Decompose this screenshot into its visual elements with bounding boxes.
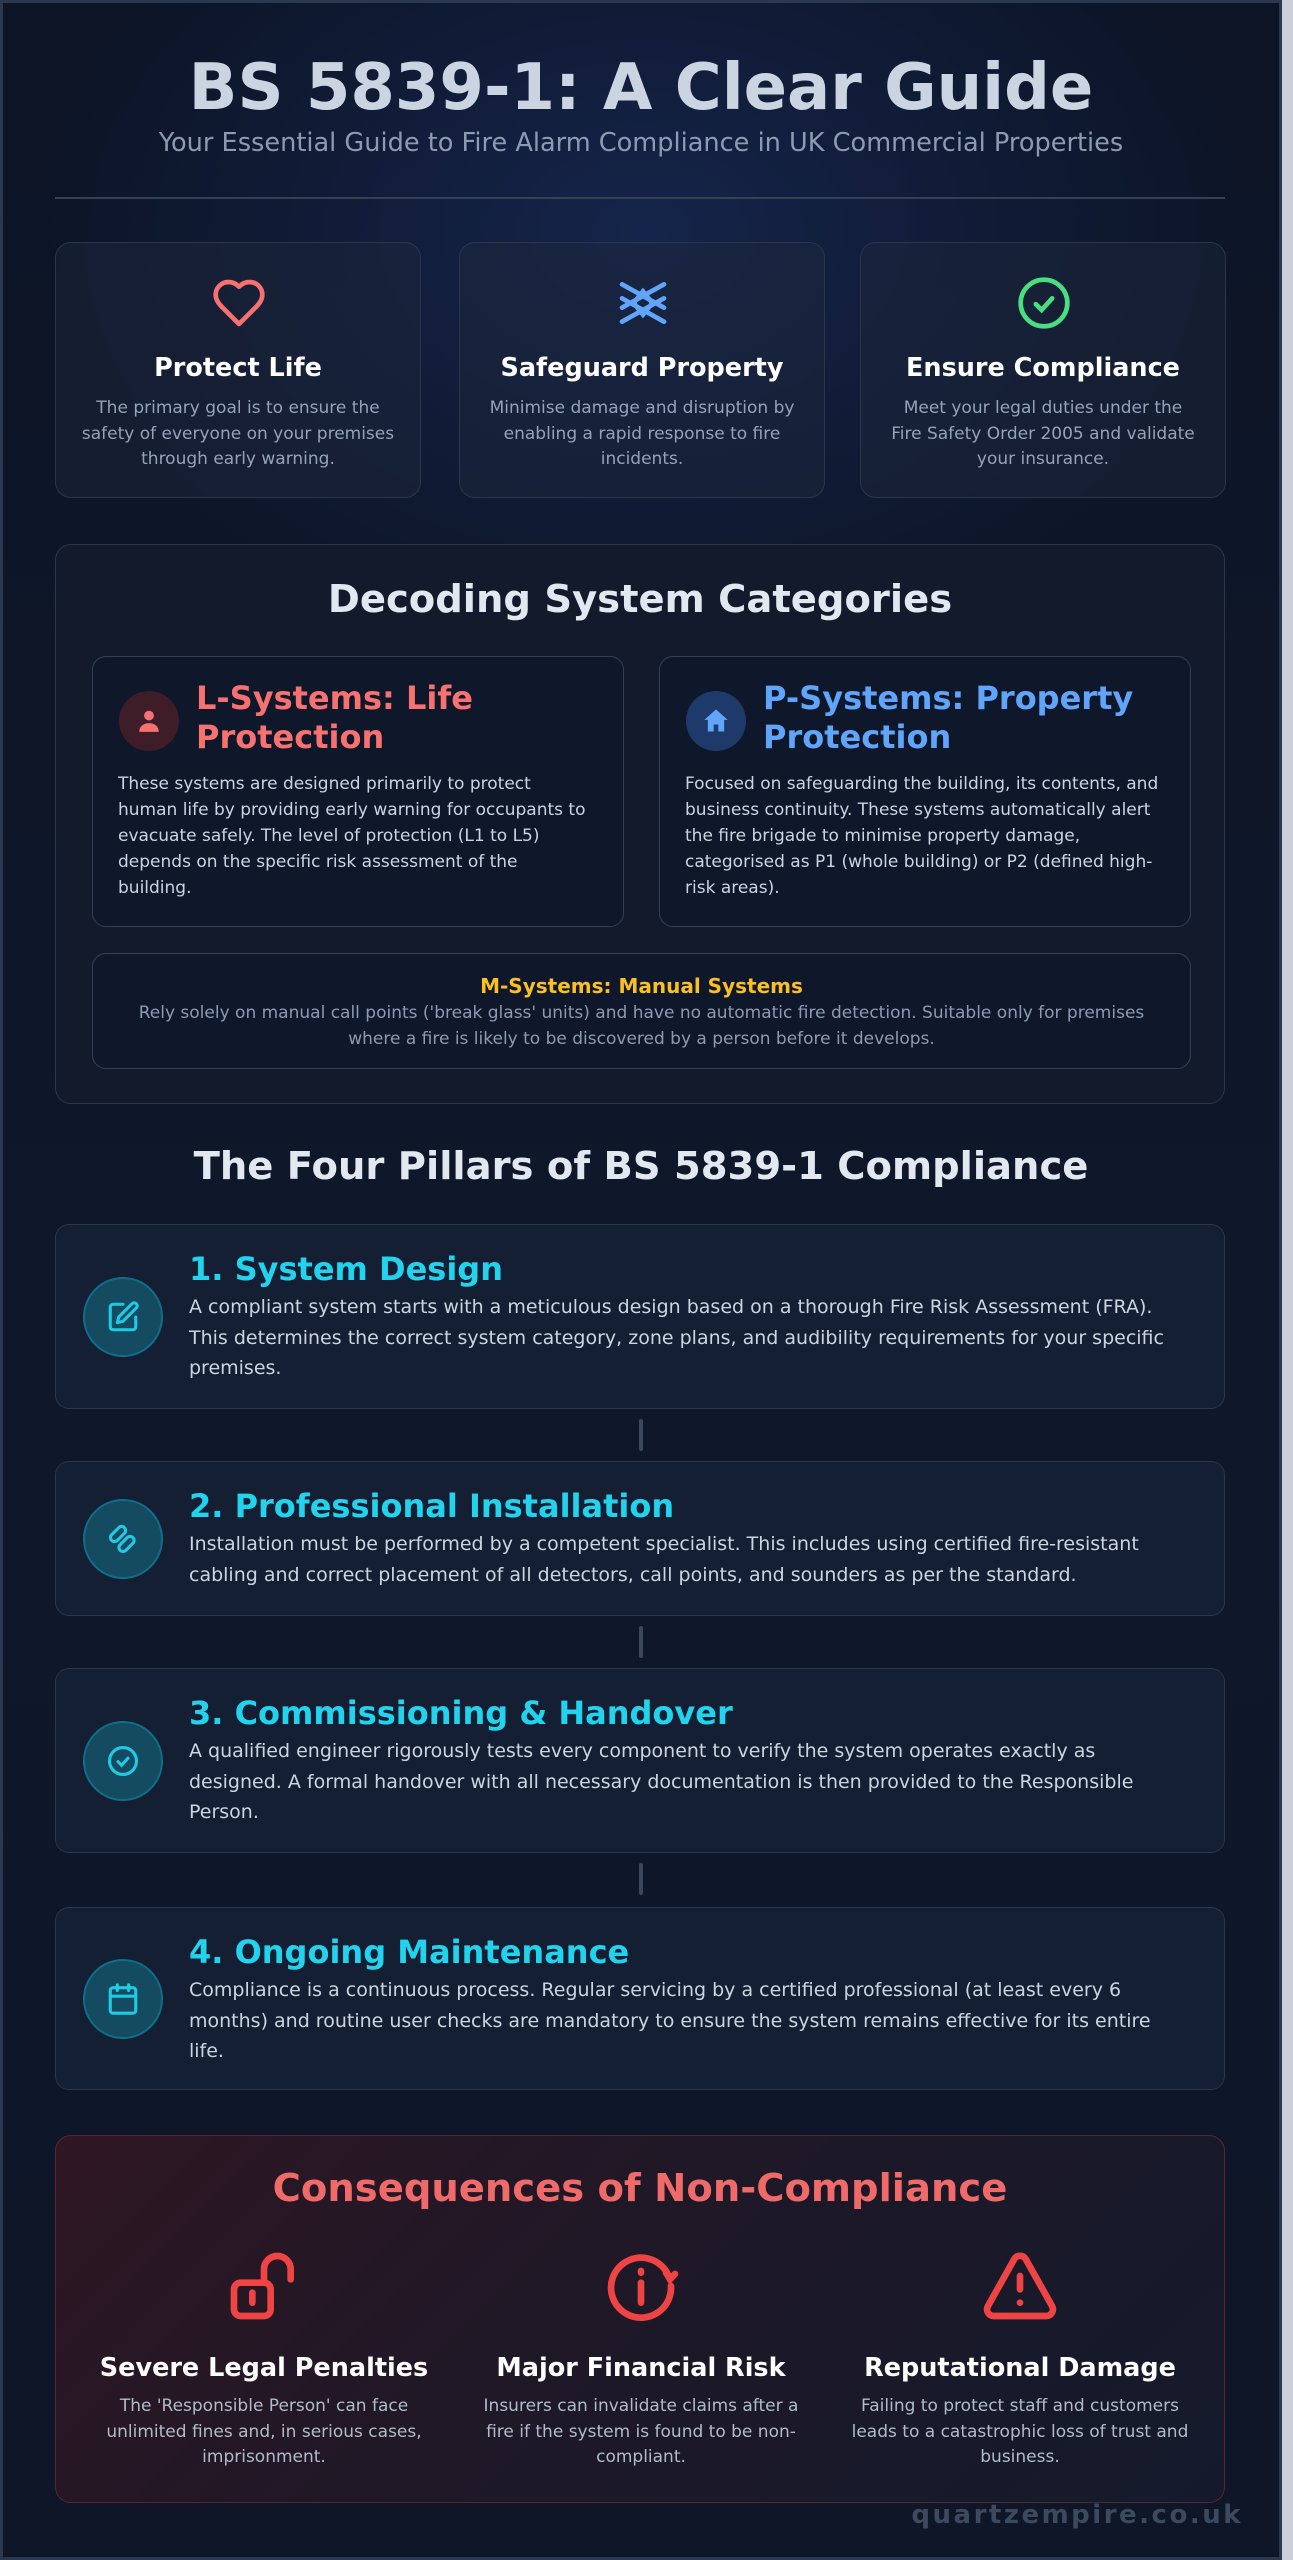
item: legal: [100, 2252, 428, 2467]
panel: consequences: [55, 2135, 1225, 2503]
pillar 4: [55, 1907, 1225, 2090]
icon: check circle: [1018, 277, 1070, 329]
heading: Severe Legal Penalties: [100, 2353, 428, 2383]
heading: 1. System Design: [189, 1250, 503, 1288]
heading: Decoding System Categories: [328, 577, 952, 622]
heading: four pillars: The Four Pillars of BS 5839-1 Compliance: [194, 1144, 1088, 1189]
heading: Major Financial Risk: [496, 2353, 786, 2383]
watermark: quartzempire.co.uk: [911, 2500, 1243, 2530]
heading: M-Systems: Manual Systems: [480, 974, 803, 998]
heading: Ensure Compliance: [906, 353, 1180, 383]
heading: 3. Commissioning & Handover: [189, 1694, 733, 1732]
heading: [196, 679, 473, 756]
icon: calendar: [83, 1959, 163, 2039]
heading: Consequences of Non-Compliance: [273, 2166, 1007, 2211]
text: Failing to protect staff and customers leads to a catastrophic loss of trust and business.: [852, 2396, 1188, 2467]
heading: Protection: [763, 718, 951, 756]
text: These systems are designed primarily to protect human life by providing early warning for occupants to evacuate safely. The level of protection (L1 to L5) depends on the specific risk assessment of the building.: [118, 774, 585, 898]
heading: Protect Life: [154, 353, 322, 383]
heading: 2. Professional Installation: [189, 1487, 674, 1525]
pillar 3: [55, 1668, 1225, 1853]
heading: Protection: [196, 718, 384, 756]
heading: [763, 679, 1133, 756]
pillar 1: [55, 1224, 1225, 1409]
title: BS 5839-1: A Clear Guide: [189, 51, 1093, 125]
item: reputation: [852, 2252, 1188, 2467]
icon: lattice: [620, 282, 666, 324]
text: Minimise damage and disruption by enabling a rapid response to fire incidents.: [490, 398, 794, 469]
icon: warning triangle: [984, 2252, 1056, 2320]
text: A compliant system starts with a meticulous design based on a thorough Fire Risk Assessment (FRA). This determines the correct system category, zone plans, and audibility requirements for your specific premises.: [189, 1296, 1164, 1379]
text: The primary goal is to ensure the safety of everyone on your premises through early warning.: [82, 398, 394, 469]
heading: 4. Ongoing Maintenance: [189, 1933, 629, 1971]
heading: Reputational Damage: [864, 2353, 1176, 2383]
icon: check circle: [83, 1721, 163, 1801]
heading: L-Systems: Life: [196, 679, 473, 717]
text: Compliance is a continuous process. Regular servicing by a certified professional (at least every 6 months) and routine user checks are mandatory to ensure the system remains effective for its entire life.: [189, 1979, 1151, 2062]
text: Focused on safeguarding the building, its contents, and business continuity. These systems automatically alert the fire brigade to minimise property damage, categorised as P1 (whole building) or P2 (defined high-risk areas).: [685, 774, 1158, 898]
card: ensure compliance: [860, 242, 1226, 498]
text: A qualified engineer rigorously tests every component to verify the system operates exactly as designed. A formal handover with all necessary documentation is then provided to the Responsible Person.: [189, 1740, 1133, 1823]
icon: info circle: [608, 2254, 678, 2321]
heading: Safeguard Property: [500, 353, 784, 383]
card: protect life: [55, 242, 421, 498]
item: financial: [484, 2254, 798, 2467]
icon: cable: [83, 1499, 163, 1579]
text: The 'Responsible Person' can face unlimited fines and, in serious cases, imprisonment.: [106, 2396, 422, 2467]
heading: P-Systems: Property: [763, 679, 1133, 717]
icon: unlock: [230, 2252, 294, 2320]
icon: pencil: [83, 1277, 163, 1357]
icon: house: [686, 691, 746, 751]
card: P-systems: [659, 656, 1191, 927]
card: L-systems: [92, 656, 624, 927]
icon: heart: [213, 280, 265, 326]
subtitle: Your Essential Guide to Fire Alarm Compliance in UK Commercial Properties: [159, 128, 1123, 158]
text: Insurers can invalidate claims after a fire if the system is found to be non-compliant.: [484, 2396, 798, 2467]
icon: person: [119, 691, 179, 751]
pillar 2: [55, 1461, 1225, 1616]
card: M-systems: [92, 953, 1191, 1069]
panel: system categories: [55, 544, 1225, 1104]
text: Meet your legal duties under the Fire Safety Order 2005 and validate your insurance.: [891, 398, 1195, 469]
text: Installation must be performed by a competent specialist. This includes using certified fire-resistant cabling and correct placement of all detectors, call points, and sounders as per the standard.: [189, 1533, 1139, 1586]
text: Rely solely on manual call points ('break glass' units) and have no automatic fire detection. Suitable only for premises where a fire is likely to be discovered by a person before it develops.: [139, 1003, 1144, 1048]
card: safeguard property: [459, 242, 825, 498]
